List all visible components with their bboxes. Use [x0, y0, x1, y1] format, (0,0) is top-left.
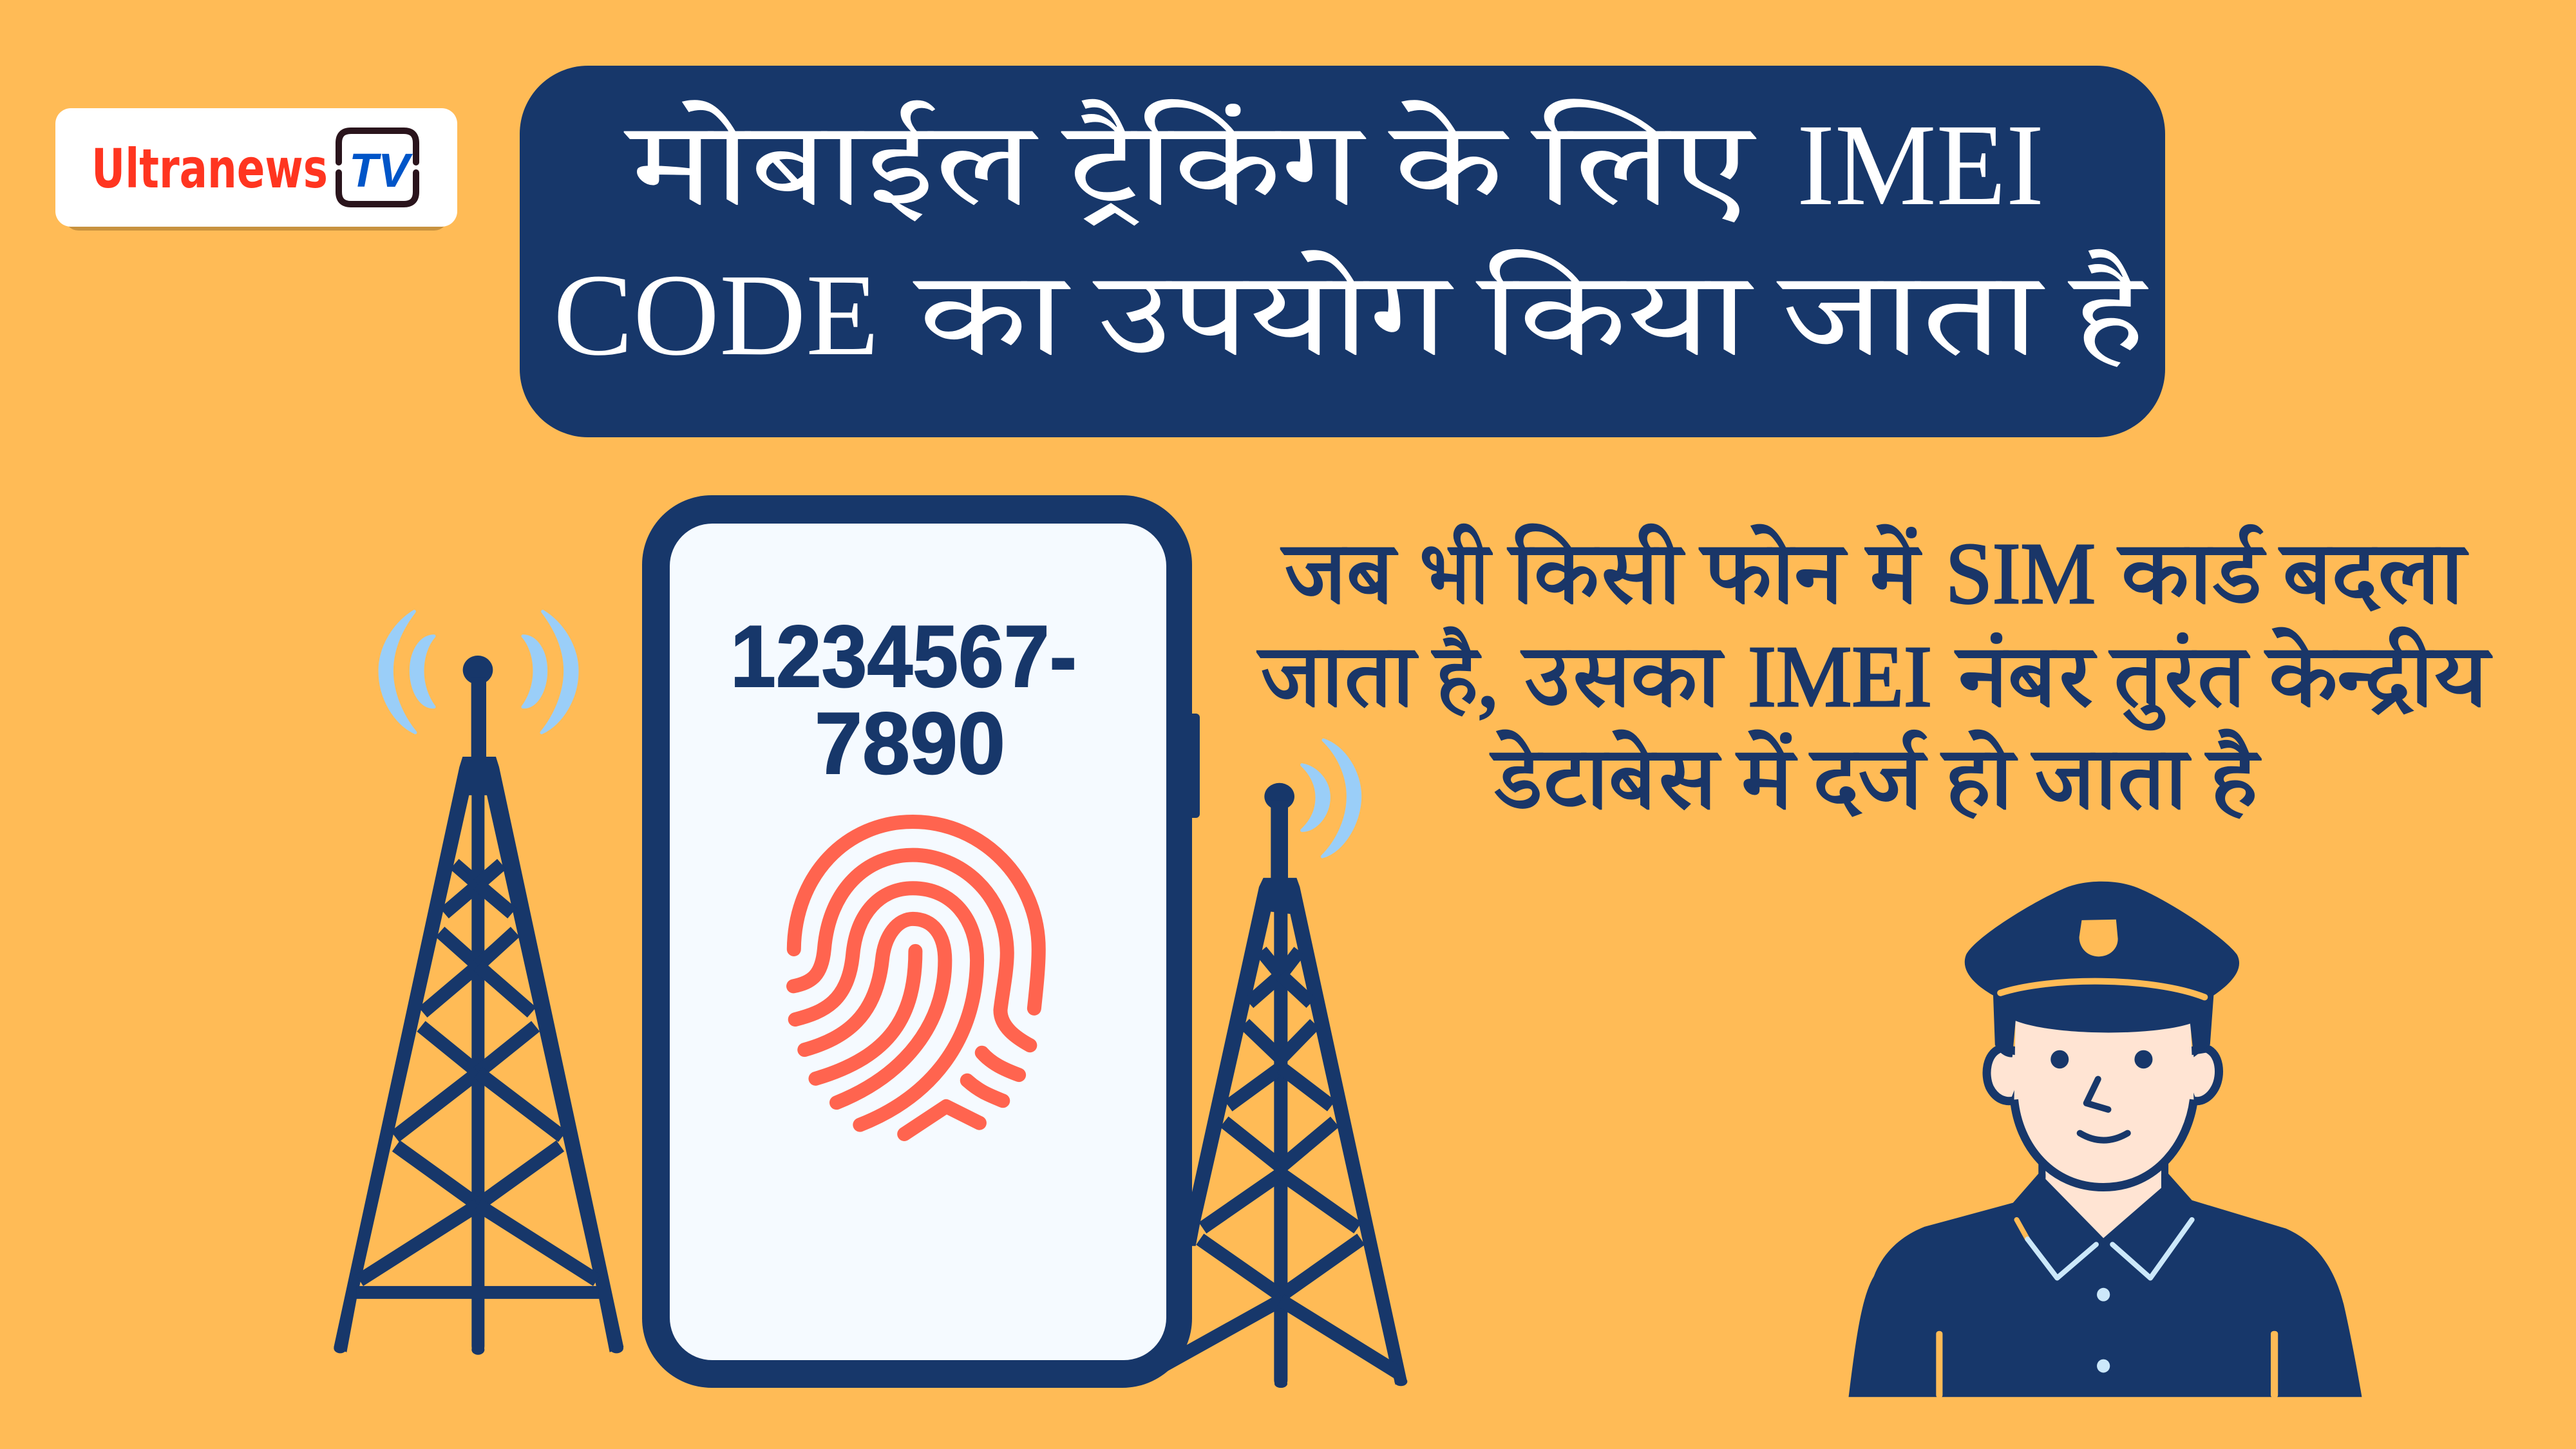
body text: हो [1940, 730, 2017, 828]
face features [2050, 1050, 2069, 1068]
IMEI number: 1234567- [730, 607, 1077, 705]
body text: कार्ड [2117, 525, 2266, 622]
logo: Ultranews TV [55, 108, 457, 231]
title banner: उपयोग [1092, 249, 1454, 380]
body text: नंबर [1955, 629, 2097, 725]
title banner: लिए [1530, 98, 1756, 230]
body text: जब [1281, 526, 1397, 622]
body text: भी [1419, 524, 1492, 622]
cap [1965, 882, 2239, 1057]
title banner: IMEI [1797, 100, 2044, 230]
logo: Ultranews TV: Ultranews [91, 137, 328, 200]
title banner: का [913, 251, 1072, 380]
title banner: के [1388, 99, 1510, 230]
title banner: जाता [1776, 251, 2046, 380]
IMEI number [730, 607, 1077, 792]
title banner: है [2067, 249, 2148, 380]
logo: Ultranews TV: TV [349, 144, 413, 197]
body text [1257, 524, 2492, 828]
body text: दर्ज [1809, 730, 1927, 828]
body text: बदला [2278, 526, 2468, 622]
body text: है [2205, 729, 2261, 828]
body text: में [1865, 525, 1922, 622]
title banner: ट्रैकिंग [1061, 99, 1367, 230]
title banner: CODE [553, 251, 879, 380]
body text: तुरंत [2109, 629, 2249, 730]
body text: उसका [1521, 629, 1724, 725]
body text: SIM [1946, 526, 2096, 622]
body text: फोन [1700, 524, 1848, 622]
body text: है, [1432, 627, 1499, 725]
body text: IMEI [1748, 629, 1932, 725]
uniform [1849, 1174, 2362, 1397]
head [1987, 1048, 2219, 1101]
body text: डेटाबेस [1490, 730, 1721, 828]
phone [642, 495, 1200, 1388]
body text: जाता [2031, 731, 2191, 828]
title banner [520, 66, 2165, 437]
body text: में [1736, 730, 1797, 828]
icon: right communication tower [1153, 740, 1407, 1388]
body text: केन्द्रीय [2264, 627, 2492, 725]
icon: left communication tower [334, 611, 623, 1355]
icon: fingerprint [793, 822, 1039, 1134]
body text: जाता [1257, 629, 1418, 725]
body text: किसी [1508, 524, 1685, 622]
icon: police officer [1849, 882, 2362, 1398]
title banner: किया [1475, 249, 1755, 380]
IMEI number: 7890 [815, 694, 1005, 792]
title banner: मोबाईल [623, 99, 1039, 230]
